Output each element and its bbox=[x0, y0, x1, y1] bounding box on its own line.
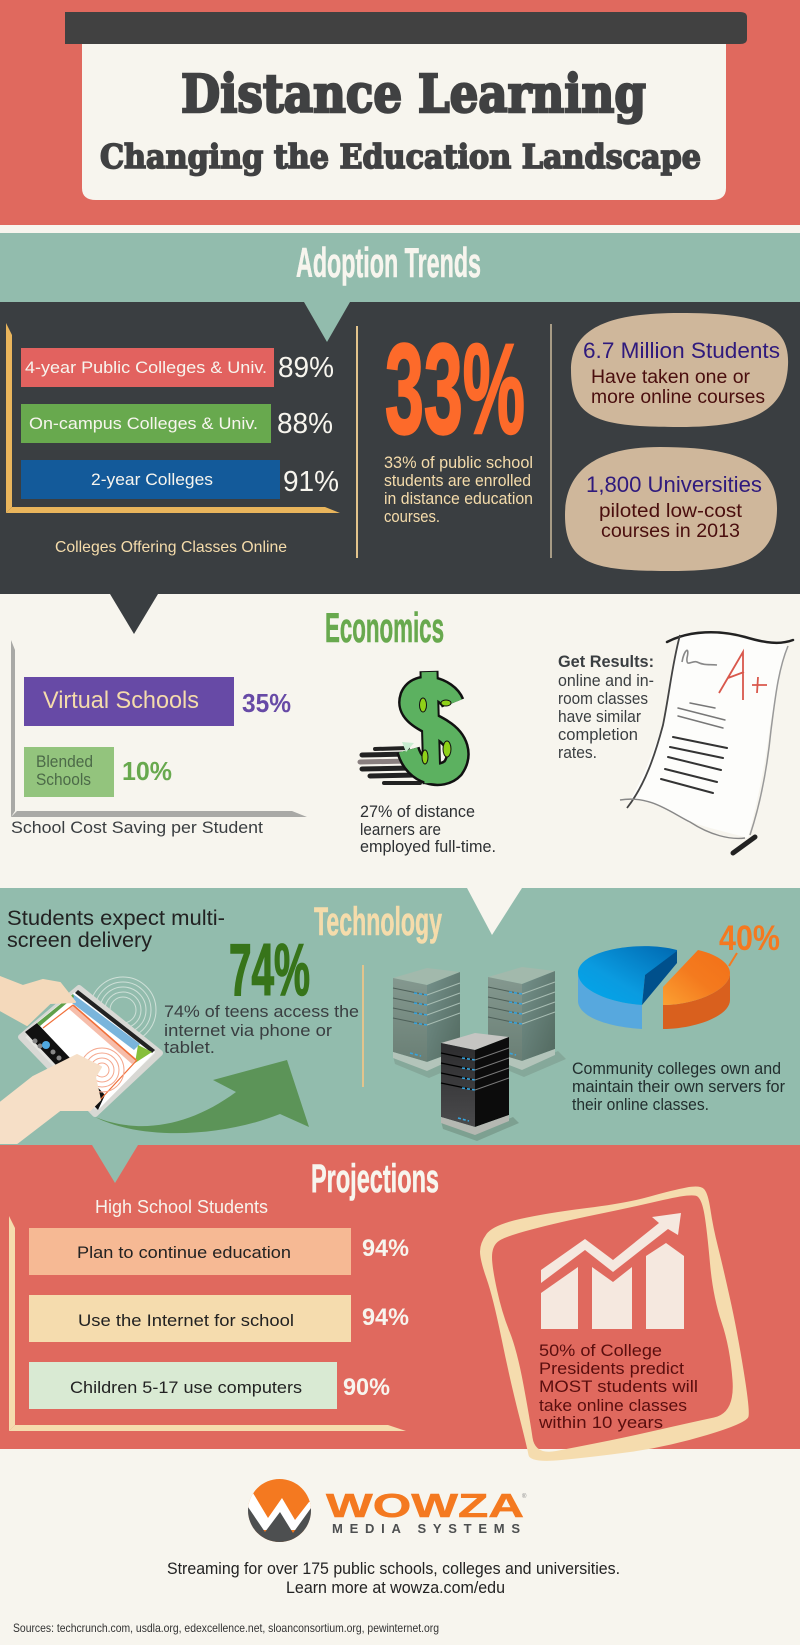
chart caption: Colleges Offering Classes Online bbox=[55, 539, 287, 556]
text: get results: rates. bbox=[558, 744, 597, 762]
bar chart: colleges offering classes online bbox=[6, 323, 340, 513]
callout: 1,800 universities bbox=[565, 447, 777, 571]
callout: 6.7 million students bbox=[571, 313, 788, 427]
heading: technology: Technology bbox=[314, 900, 442, 944]
bar chart: colleges offering classes online: 89% bbox=[278, 352, 334, 384]
bar chart: colleges offering classes online: 2-year Colleges bbox=[91, 470, 213, 489]
icon: black server bbox=[441, 1033, 519, 1141]
icon: gray server left bbox=[393, 968, 471, 1078]
bar chart: school cost saving: Schools bbox=[36, 771, 91, 789]
text: employed full-time: employed full-time. bbox=[360, 838, 496, 856]
heading: projections: Projections bbox=[311, 1157, 439, 1201]
text: get results: online and in- bbox=[558, 672, 654, 690]
callout: 1,800 universities: courses in 2013 bbox=[601, 521, 740, 542]
logo mark bbox=[248, 1479, 311, 1542]
text: get results bbox=[558, 653, 654, 762]
text: community colleges bbox=[572, 1060, 785, 1114]
text: teens access: internet via phone or bbox=[164, 1021, 332, 1040]
text: community colleges: their online classes. bbox=[572, 1096, 709, 1114]
subtitle: Changing the Education Landscape bbox=[100, 137, 701, 176]
bar chart: colleges offering classes online: 88% bbox=[277, 408, 333, 440]
text: teens access bbox=[164, 1002, 359, 1057]
pie label 40%: 40% bbox=[719, 919, 780, 958]
text: get results: Get Results: bbox=[558, 653, 654, 671]
text: college presidents: 50% of College bbox=[539, 1341, 662, 1360]
text: college presidents: within 10 years bbox=[538, 1413, 663, 1432]
bar chart: school cost saving: Virtual Schools bbox=[43, 687, 199, 714]
arrow bbox=[95, 1060, 309, 1133]
bar chart: school cost saving bbox=[11, 640, 307, 817]
pointer triangle bbox=[92, 1145, 138, 1183]
footer: wowza logo: ® bbox=[522, 1493, 527, 1500]
pointer triangle bbox=[467, 888, 522, 935]
callout: 1,800 universities: piloted low-cost bbox=[599, 501, 743, 522]
panel: projections bbox=[0, 1145, 800, 1449]
text: get results: room classes bbox=[558, 690, 648, 708]
bar chart: high school students bbox=[9, 1216, 409, 1431]
icon: graded paper A+ bbox=[620, 632, 793, 853]
header panel bbox=[0, 0, 800, 225]
text: teens access: 74% of teens access the bbox=[164, 1002, 359, 1021]
callout: 1,800 universities: 1,800 Universities bbox=[586, 472, 762, 497]
text: 33% enrolled bbox=[384, 454, 533, 526]
footer panel background bbox=[0, 1449, 800, 1645]
chart caption: School Cost Saving per Student bbox=[11, 818, 263, 837]
text: college presidents: Presidents predict bbox=[539, 1359, 684, 1378]
panel: economics bbox=[0, 594, 800, 888]
icon: dollar sign bbox=[360, 671, 458, 784]
text: multi-screen delivery: screen delivery bbox=[7, 929, 153, 952]
hand-drawn frame bbox=[480, 1187, 749, 1461]
callout: 6.7 million students: more online courses bbox=[591, 387, 765, 408]
text: get results: completion bbox=[558, 726, 638, 744]
pointer triangle bbox=[304, 302, 350, 342]
text: multi-screen delivery: Students expect multi- bbox=[7, 907, 225, 930]
bar chart: high school students: Plan to continue education bbox=[77, 1243, 291, 1262]
text: 33% enrolled: 33% of public school bbox=[384, 454, 533, 472]
panel: technology bbox=[0, 888, 800, 1145]
bar chart: school cost saving: 35% bbox=[242, 688, 291, 718]
header card bbox=[82, 44, 726, 200]
callout: 6.7 million students: Have taken one or bbox=[591, 367, 751, 388]
heading: economics: Economics bbox=[325, 604, 444, 651]
bar chart: high school students: Children 5-17 use computers bbox=[70, 1378, 302, 1397]
footer text bbox=[167, 1560, 620, 1597]
pointer triangle bbox=[110, 594, 158, 634]
text: 33% enrolled: courses. bbox=[384, 508, 440, 526]
callout: 6.7 million students: 6.7 Million Students bbox=[583, 338, 780, 363]
text: 33% enrolled: students are enrolled bbox=[384, 472, 531, 490]
footer: wowza logo bbox=[245, 1477, 527, 1545]
bar chart: high school students: 90% bbox=[343, 1374, 390, 1401]
big number 33%: 33% bbox=[385, 318, 525, 461]
header dark bar bbox=[65, 12, 747, 44]
text: get results: have similar bbox=[558, 708, 641, 726]
bar chart: high school students: 94% bbox=[362, 1304, 409, 1331]
bar chart: school cost saving: 10% bbox=[122, 756, 172, 786]
footer text: Learn more at wowza.com/edu bbox=[286, 1579, 505, 1597]
big number 74%: 74% bbox=[229, 930, 310, 1011]
chart caption: High School Students bbox=[95, 1197, 268, 1217]
icon: tablet with hands bbox=[0, 977, 160, 1143]
text: community colleges: maintain their own servers for bbox=[572, 1078, 785, 1096]
bar chart: high school students: Use the Internet for school bbox=[78, 1311, 294, 1330]
icon: growth chart bbox=[541, 1213, 684, 1329]
text: employed full-time: 27% of distance bbox=[360, 803, 475, 821]
text: college presidents: take online classes bbox=[539, 1396, 687, 1415]
text: multi-screen delivery bbox=[7, 907, 225, 952]
title: Distance Learning bbox=[181, 64, 646, 125]
bar chart: colleges offering classes online: 4-year Public Colleges & Univ. bbox=[25, 358, 267, 377]
footer: wowza logo: MEDIA SYSTEMS bbox=[332, 1521, 520, 1536]
logo wordmark: WOWZA bbox=[326, 1487, 524, 1524]
bar chart: high school students: 94% bbox=[362, 1235, 409, 1262]
bar chart: colleges offering classes online: On-campus Colleges & Univ. bbox=[29, 414, 258, 433]
text: employed full-time: learners are bbox=[360, 821, 441, 839]
text: teens access: tablet. bbox=[164, 1038, 215, 1057]
text: community colleges: Community colleges own and bbox=[572, 1060, 781, 1078]
panel: adoption trends bbox=[0, 225, 800, 594]
text: college presidents bbox=[538, 1341, 698, 1432]
text: employed full-time bbox=[360, 803, 496, 856]
heading: adoption trends: Adoption Trends bbox=[296, 239, 481, 286]
bar chart: school cost saving: Blended bbox=[36, 753, 93, 771]
icon: gray server right bbox=[488, 967, 566, 1077]
text: 33% enrolled: in distance education bbox=[384, 490, 533, 508]
pie chart bbox=[578, 946, 737, 1029]
text: college presidents: MOST students will bbox=[539, 1377, 698, 1396]
sources: Sources: techcrunch.com, usdla.org, edexcellence.net, sloanconsortium.org, pewinternet.org bbox=[13, 1621, 439, 1635]
bar chart: colleges offering classes online: 91% bbox=[283, 466, 339, 498]
footer text: Streaming for over 175 public schools, colleges and universities. bbox=[167, 1560, 620, 1578]
callout: hand-drawn frame with growth chart bbox=[480, 1187, 749, 1461]
